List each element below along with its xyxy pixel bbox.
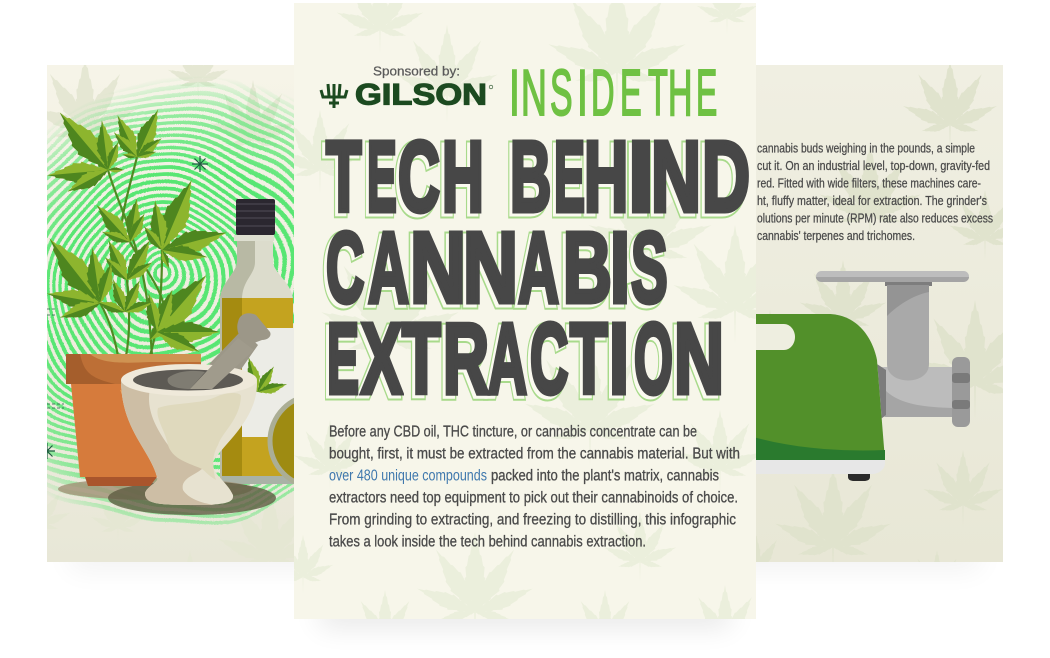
title: tech behind cannabis extraction: N	[674, 303, 724, 415]
title: tech behind cannabis extraction: B	[507, 124, 548, 236]
title: tech behind cannabis extraction: N	[462, 212, 518, 324]
title: tech behind cannabis extraction: N	[407, 215, 463, 327]
green motor body	[750, 314, 885, 481]
title: inside the: I	[509, 56, 520, 129]
title: tech behind cannabis extraction: H	[442, 121, 483, 233]
title: tech behind cannabis extraction: O	[634, 303, 673, 415]
title: tech behind cannabis extraction: C	[323, 215, 362, 327]
title: tech behind cannabis extraction: T	[399, 306, 437, 418]
title: tech behind cannabis extraction: T	[567, 306, 604, 418]
title: tech behind cannabis extraction: O	[631, 306, 670, 418]
title: tech behind cannabis extraction: D	[699, 124, 747, 236]
title: tech behind cannabis extraction: I	[606, 306, 626, 418]
small leaf on label	[248, 358, 287, 394]
title: tech behind cannabis extraction: N	[671, 306, 721, 418]
title: tech behind cannabis extraction: I	[606, 306, 626, 418]
title: tech behind cannabis extraction: B	[510, 121, 551, 233]
intro paragraph: bought, first, it must be extracted from the cannabis material. But with	[329, 446, 740, 462]
title: tech behind cannabis extraction: C	[398, 121, 440, 233]
title: tech behind cannabis extraction: H	[439, 124, 480, 236]
title: tech behind cannabis extraction: S	[628, 215, 665, 327]
title: tech behind cannabis extraction: E	[550, 124, 582, 236]
title: tech behind cannabis extraction: N	[651, 121, 701, 233]
background leaves left	[47, 65, 294, 151]
title: inside the: H	[668, 56, 692, 129]
leaf H	[98, 279, 153, 313]
title: tech behind cannabis extraction: E	[364, 124, 393, 236]
feed tube and auger	[877, 285, 970, 427]
body text continued: red. Fitted with wide filters, these machines care-	[757, 176, 981, 190]
oil bottle	[220, 199, 294, 484]
title: tech behind cannabis extraction: I	[607, 215, 627, 327]
title: tech behind cannabis extraction: I	[610, 212, 630, 324]
title: tech behind cannabis extraction: I	[628, 121, 653, 233]
Gilson logo	[321, 78, 493, 112]
panel: right page with grinder illustration	[756, 65, 1003, 562]
title: tech behind cannabis extraction: R	[440, 306, 486, 418]
pestle	[208, 313, 270, 370]
title: tech behind cannabis extraction: N	[407, 215, 463, 327]
leaf F	[47, 238, 113, 318]
title: tech behind cannabis extraction: N	[460, 215, 515, 327]
title: tech behind cannabis extraction: A	[485, 306, 524, 418]
title: tech behind cannabis extraction: H	[581, 124, 626, 236]
title: tech behind cannabis extraction: A	[368, 212, 409, 324]
terracotta pot	[66, 354, 201, 486]
body text continued: cannabis buds weighing in the pounds, a simple	[757, 142, 975, 156]
title: tech behind cannabis extraction: T	[399, 306, 437, 418]
title: tech behind cannabis extraction: S	[628, 215, 665, 327]
title: tech behind cannabis extraction: D	[699, 124, 747, 236]
title: tech behind cannabis extraction: N	[460, 215, 515, 327]
title: tech behind cannabis extraction: B	[560, 215, 609, 327]
title: tech behind cannabis extraction: E	[367, 121, 396, 233]
title: tech behind cannabis extraction: D	[702, 121, 750, 233]
green concentric wave rings	[47, 79, 294, 525]
title: tech behind cannabis extraction: E	[324, 306, 356, 418]
title dark solid layer	[325, 121, 750, 415]
intro paragraph: extractors need top equipment to pick out their cannabinoids of choice.	[329, 490, 738, 506]
title: tech behind cannabis extraction: T	[326, 121, 361, 233]
title: tech behind cannabis extraction: T	[402, 303, 440, 415]
title: tech behind cannabis extraction: T	[570, 303, 607, 415]
title: inside the: D	[591, 56, 614, 129]
title: tech behind cannabis extraction: N	[671, 306, 721, 418]
title: tech behind cannabis extraction: E	[324, 306, 356, 418]
title: tech behind cannabis extraction: S	[631, 212, 668, 324]
drop shadows	[70, 540, 980, 626]
title: tech behind cannabis extraction: C	[527, 306, 566, 418]
title: tech behind cannabis extraction: A	[515, 215, 556, 327]
title: tech behind cannabis extraction: C	[527, 306, 566, 418]
title: tech behind cannabis extraction: C	[395, 124, 437, 236]
ground shadows	[58, 478, 276, 515]
title: tech behind cannabis extraction: X	[358, 306, 399, 418]
title: tech behind cannabis extraction: C	[395, 124, 437, 236]
meat grinder machine	[750, 271, 970, 481]
title: tech behind cannabis extraction: R	[443, 303, 489, 415]
title: inside the: N	[521, 56, 547, 129]
title: tech behind cannabis extraction: T	[567, 306, 604, 418]
title: tech behind cannabis extraction: E	[550, 124, 582, 236]
intro paragraph: over 480 unique compounds	[329, 468, 487, 484]
leaf E	[104, 240, 152, 280]
title: tech behind cannabis extraction: E	[364, 124, 393, 236]
title: tech behind cannabis extraction: A	[515, 215, 556, 327]
title: tech behind cannabis extraction: N	[410, 212, 466, 324]
body text continued: ht, fluffy matter, ideal for extraction. The grinder's	[757, 194, 987, 208]
leaf B	[114, 110, 162, 158]
title: tech behind cannabis extraction: I	[624, 124, 650, 236]
title: tech behind cannabis extraction: I	[624, 124, 650, 236]
title: tech behind cannabis extraction: A	[518, 212, 559, 324]
Gilson logo: GILSON	[355, 78, 487, 112]
leaf D	[96, 198, 144, 243]
intro paragraph	[329, 424, 740, 550]
title: tech behind cannabis extraction: O	[631, 306, 670, 418]
title: tech behind cannabis extraction: T	[323, 124, 358, 236]
intro paragraph: packed into the plant's matrix, cannabis	[491, 468, 719, 484]
title: tech behind cannabis extraction: A	[365, 215, 406, 327]
title: inside the: E	[620, 56, 642, 129]
background leaves right	[756, 65, 1003, 562]
title: tech behind cannabis extraction: I	[609, 303, 629, 415]
title: tech behind cannabis extraction: H	[581, 124, 626, 236]
title: tech behind cannabis extraction: C	[530, 303, 569, 415]
intro paragraph: From grinding to extracting, and freezing to distilling, this infographic	[329, 512, 736, 528]
title: tech behind cannabis extraction: B	[507, 124, 548, 236]
body text continued: cannabis' terpenes and trichomes.	[757, 229, 915, 243]
background leaves centre	[294, 3, 756, 619]
title: tech behind cannabis extraction: A	[485, 306, 524, 418]
title: tech behind cannabis extraction: X	[361, 303, 402, 415]
leaf C	[144, 180, 226, 268]
title: inside the: E	[696, 56, 717, 129]
title: tech behind cannabis extraction: R	[440, 306, 486, 418]
title: tech behind cannabis extraction: X	[358, 306, 399, 418]
cannabis plant	[47, 110, 226, 354]
title: tech behind cannabis extraction: H	[439, 124, 480, 236]
title: inside the: S	[550, 56, 573, 129]
panel: left page with mortar illustration	[47, 65, 294, 562]
title: tech behind cannabis extraction: N	[648, 124, 698, 236]
title: tech behind cannabis extraction: C	[323, 215, 362, 327]
icon: trident	[321, 84, 347, 108]
sponsor label: Sponsored by:	[373, 64, 460, 78]
title: inside the: I	[577, 56, 588, 129]
intro paragraph: takes a look inside the tech behind cannabis extraction.	[329, 534, 646, 550]
title: tech behind cannabis extraction: A	[365, 215, 406, 327]
title: tech behind cannabis extraction: T	[323, 124, 358, 236]
title: tech behind cannabis extraction: E	[554, 121, 585, 233]
title: inside the: T	[648, 56, 668, 129]
hopper tray	[816, 271, 969, 286]
title: tech behind cannabis extraction: A	[488, 303, 527, 415]
title: tech behind cannabis extraction: B	[563, 212, 612, 324]
small star marks	[39, 156, 208, 459]
title: tech behind cannabis extraction: H	[584, 121, 629, 233]
title: tech behind cannabis extraction: B	[560, 215, 609, 327]
leaf G	[146, 275, 220, 352]
title: tech behind cannabis extraction: E	[326, 303, 359, 415]
stone mortar	[121, 364, 257, 505]
title: tech behind cannabis extraction: C	[326, 212, 365, 324]
leaf A	[47, 112, 124, 192]
intro paragraph: Before any CBD oil, THC tincture, or cannabis concentrate can be	[329, 424, 697, 440]
body text continued	[757, 142, 993, 243]
title: tech behind cannabis extraction: N	[648, 124, 698, 236]
body text continued: cut it. On an industrial level, top-down, gravity-fed	[757, 159, 990, 173]
panel: centre cover page	[294, 3, 756, 619]
title: tech behind cannabis extraction: I	[607, 215, 627, 327]
body text continued: olutions per minute (RPM) rate also reduces excess	[757, 212, 993, 226]
